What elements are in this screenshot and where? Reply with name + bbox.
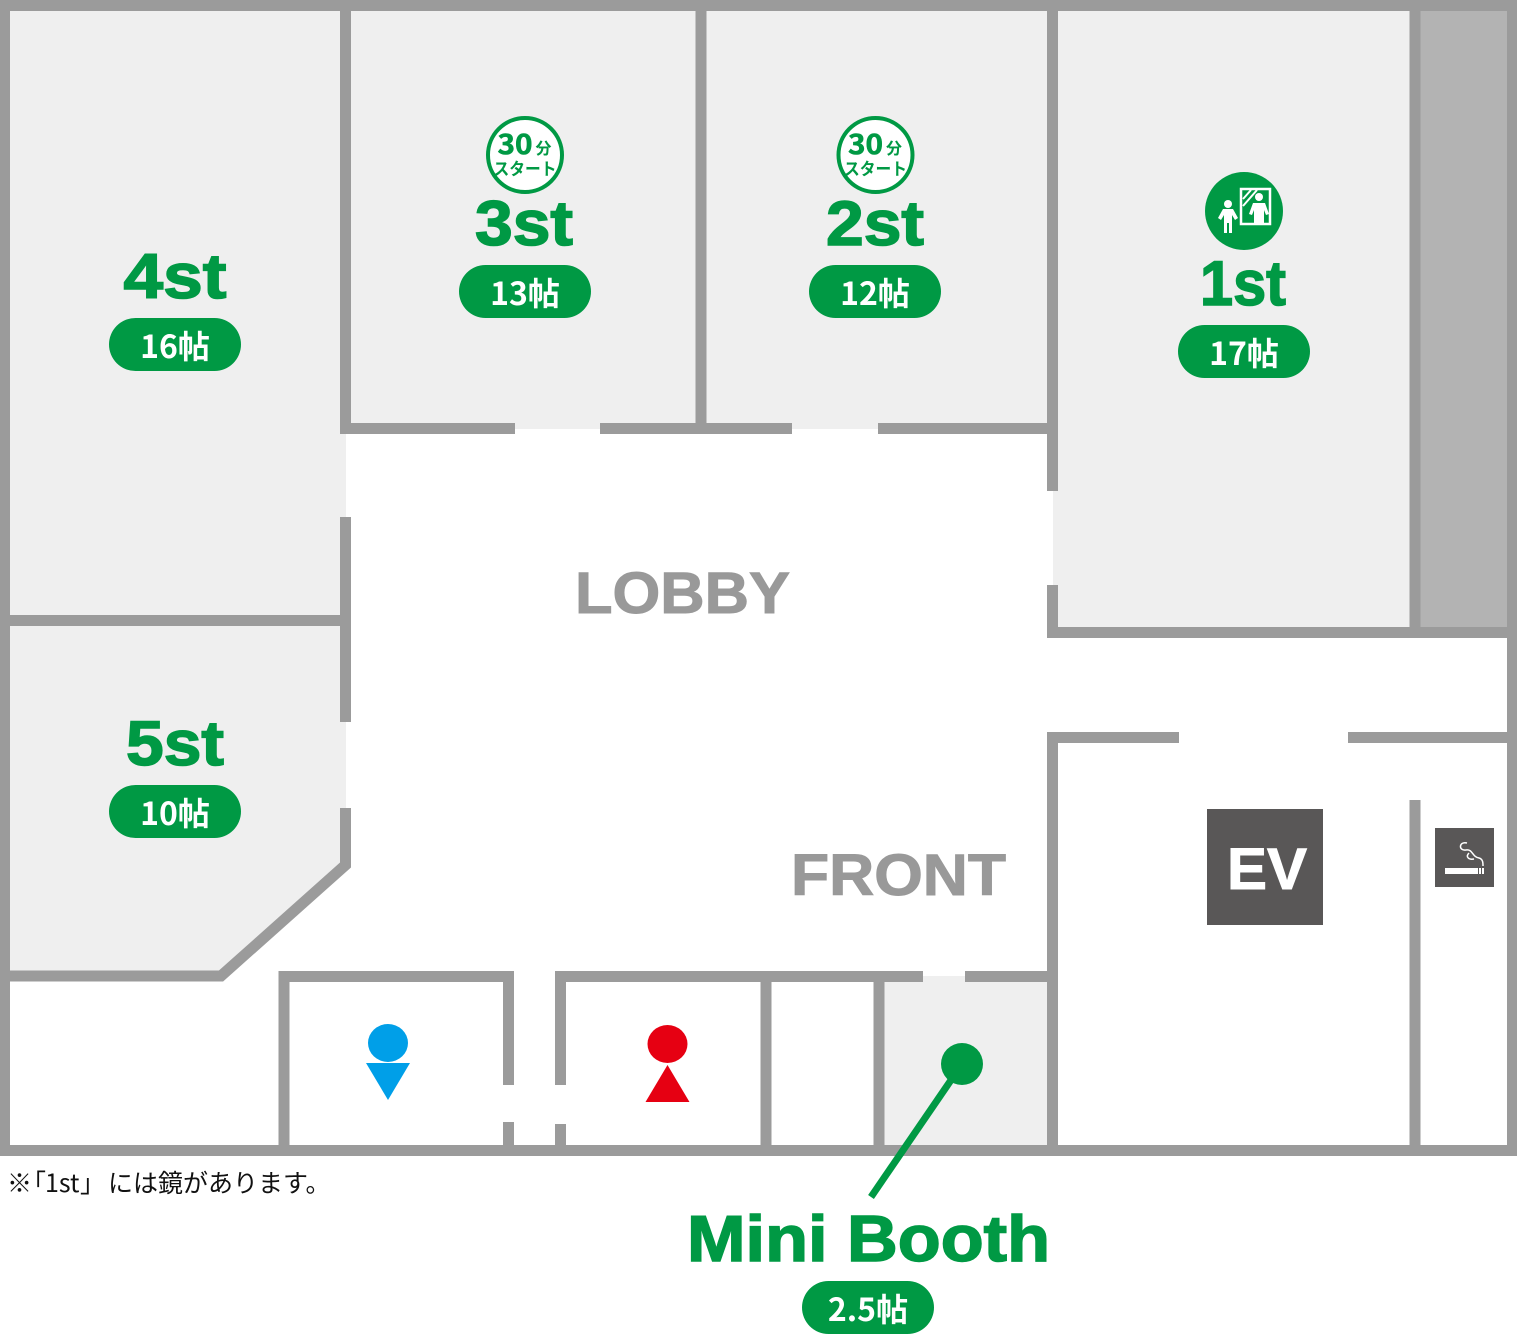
note: には鏡があります。 — [108, 1164, 331, 1200]
icon: smoking area — [1435, 828, 1494, 887]
icon: men's restroom — [366, 1024, 410, 1100]
room: 2st: 2st — [826, 189, 924, 259]
badge: 30 minute start: 30 — [848, 123, 883, 162]
badge: 30 minute start: スタート — [844, 155, 907, 180]
note: 」 — [80, 1164, 105, 1200]
label: lobby: LOBBY — [575, 561, 790, 626]
room: 4st — [109, 242, 241, 371]
room: 3st — [459, 118, 591, 318]
note: 「 — [21, 1164, 46, 1200]
room: 4st: 4st — [124, 242, 227, 312]
badge: 30 minute start: 分 — [886, 135, 902, 159]
leader line: mini booth — [871, 1043, 983, 1197]
badge: 30 minute start — [488, 118, 562, 192]
room: 2st: 12帖 — [840, 269, 910, 315]
storage area — [1415, 5, 1511, 633]
room: 3st: 13帖 — [490, 269, 560, 315]
badge: 30 minute start: 分 — [535, 135, 552, 159]
icon: elevator — [1207, 809, 1323, 925]
room: mini booth label: Mini Booth — [687, 1202, 1050, 1275]
room: 5st: 10帖 — [140, 789, 210, 835]
room: mini booth label: 2.5帖 — [828, 1285, 908, 1331]
icon: women's restroom — [646, 1025, 690, 1102]
room: mini booth label — [687, 1202, 1050, 1334]
room floors — [5, 5, 1415, 1150]
room: 3st: 3st — [475, 189, 573, 259]
note: 1st — [45, 1164, 80, 1200]
room: 5st: 5st — [126, 709, 224, 779]
badge: 30 minute start — [838, 118, 912, 192]
note: ※ — [7, 1164, 32, 1200]
icon: person and mirror — [1205, 172, 1283, 250]
room: 1st: 17帖 — [1209, 329, 1279, 375]
icon: elevator: EV — [1227, 837, 1307, 902]
badge: 30 minute start: スタート — [494, 155, 556, 180]
badge: 30 minute start: 30 — [498, 123, 532, 162]
room: 5st — [109, 709, 241, 838]
room: 1st: 1st — [1200, 249, 1286, 319]
room: 1st — [1178, 172, 1310, 378]
room: 4st: 16帖 — [140, 322, 210, 368]
label: front: FRONT — [791, 843, 1006, 908]
room: 2st — [809, 118, 941, 318]
